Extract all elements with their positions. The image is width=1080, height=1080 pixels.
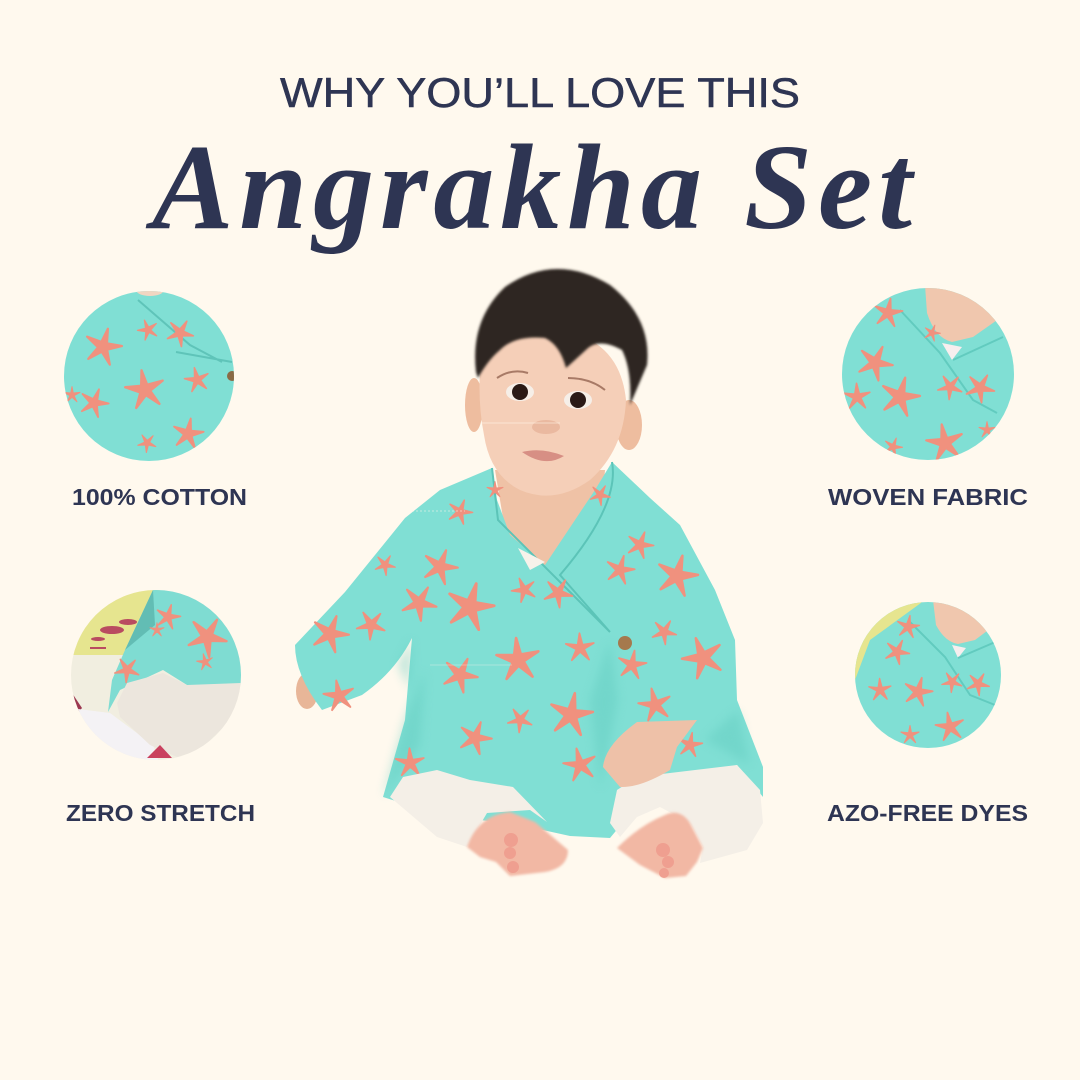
right hand [603,720,697,787]
kurta shading [383,638,750,797]
panel: 100% cotton [60,284,247,510]
pants [390,765,763,863]
eyes [497,371,605,409]
icon: azo-free dyes circle [850,600,1006,750]
icon: zero stretch circle [70,590,245,765]
hair [475,269,648,405]
panel: zero stretch [66,590,255,826]
label: AZO-FREE DYES [827,800,1028,826]
panel: azo-free dyes [827,600,1028,826]
feet [467,812,703,878]
collar and wrap seam [492,462,613,632]
icon: cotton fabric circle [64,291,234,461]
label: 100% COTTON [72,484,247,510]
light streaks [412,423,560,665]
panel: woven fabric [828,285,1028,510]
starfish print [308,481,728,786]
icon: woven fabric circle [840,285,1020,465]
baby illustration [295,269,763,878]
neck [495,470,605,575]
face [480,330,626,496]
nose [532,420,560,434]
mouth [522,450,564,461]
button [618,636,632,650]
ears [465,378,483,432]
heading: why you'll love this: WHY YOU’LL LOVE THIS [280,69,800,116]
left hand [296,673,318,709]
title: Angrakha Set: Angrakha Set [145,120,915,255]
label: ZERO STRETCH [66,800,255,826]
toes [504,833,674,878]
label: WOVEN FABRIC [828,484,1028,510]
kurta [295,462,763,838]
